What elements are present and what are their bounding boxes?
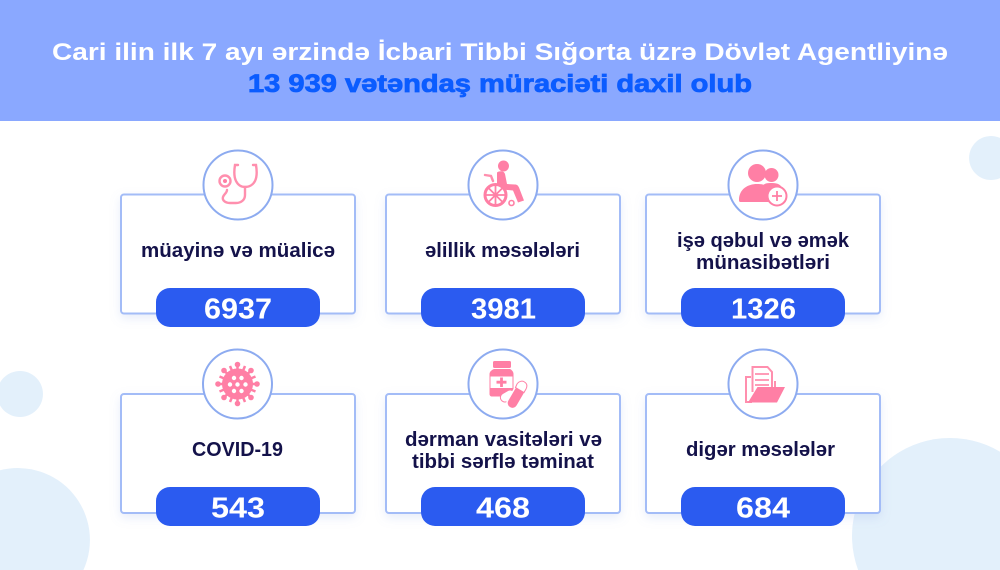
- panel: digər məsələlər: [646, 350, 880, 526]
- label: işə qəbul və əmək: [677, 230, 850, 252]
- label: müayinə və müalicə: [141, 240, 335, 262]
- number pill: 468: [476, 492, 530, 524]
- icon: folder with documents: [728, 350, 798, 418]
- header banner: [0, 0, 1000, 121]
- icon: wheelchair: [468, 150, 538, 220]
- number pill: 543: [211, 492, 265, 524]
- label: COVID-19: [192, 439, 283, 461]
- label: [405, 429, 602, 473]
- icon: stethoscope: [204, 150, 272, 220]
- label: əlillik məsələləri: [425, 240, 580, 262]
- number pill: 6937: [204, 294, 272, 326]
- panel: dərman vasitələri və tibbi sərflə təminat: [386, 350, 620, 526]
- panel: əlillik məsələləri: [386, 150, 620, 327]
- number pill: 3981: [471, 294, 536, 326]
- number pill: [421, 288, 585, 327]
- number pill: 1326: [731, 294, 796, 326]
- number pill: [156, 288, 320, 327]
- title line 1: Cari ilin ilk 7 ayı ərzində İcbari Tibbi Sığorta üzrə Dövlət Agentliyinə: [52, 39, 948, 66]
- number pill: [421, 487, 585, 526]
- number pill: [156, 487, 320, 526]
- panel: müayinə və müalicə: [121, 150, 355, 327]
- icon: virus: [203, 350, 272, 418]
- icon: medicine bottle and pills: [468, 350, 538, 418]
- icon: people with plus: [728, 150, 798, 220]
- label: dərman vasitələri və: [405, 429, 602, 451]
- panel: işə qəbul və əmək münasibətləri: [646, 150, 880, 327]
- decorative background circles: [0, 136, 1000, 570]
- title line 2: 13 939 vətəndaş müraciəti daxil olub: [248, 70, 752, 98]
- number pill: [681, 487, 845, 526]
- number pill: [681, 288, 845, 327]
- panel: COVID-19: [121, 350, 355, 526]
- label: tibbi sərflə təminat: [412, 451, 594, 473]
- label: digər məsələlər: [686, 439, 835, 461]
- label: münasibətləri: [696, 252, 830, 274]
- number pill: 684: [736, 492, 790, 524]
- label: [677, 230, 850, 274]
